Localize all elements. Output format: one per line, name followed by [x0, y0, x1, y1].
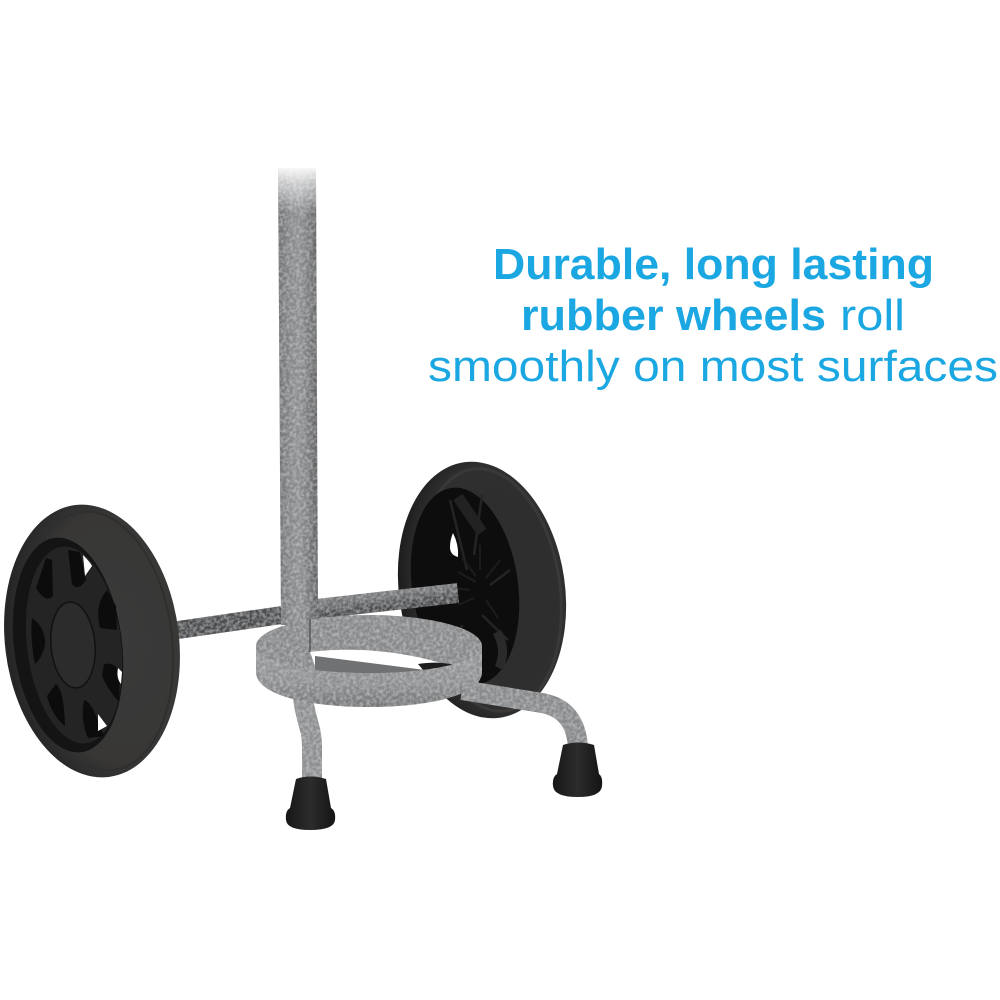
hub face — [15, 541, 133, 749]
hub opening — [1, 531, 135, 759]
ring seam — [309, 619, 311, 652]
pole body — [278, 168, 318, 625]
text line 2: roll — [840, 291, 905, 340]
gaps in hub — [83, 555, 122, 731]
right rear wheel — [382, 451, 582, 729]
hub slots — [31, 550, 120, 738]
text line 3: smoothly on most surfaces — [428, 342, 998, 391]
ring front band — [256, 646, 482, 707]
left front wheel — [0, 494, 195, 788]
heading: wheel description — [428, 240, 998, 391]
hub opening — [399, 481, 531, 691]
left rubber foot — [286, 776, 335, 830]
text line 1: Durable, long lasting — [493, 240, 934, 289]
central pole — [274, 165, 322, 625]
axle: right — [316, 593, 458, 609]
ring opening — [310, 650, 452, 680]
text line 2: rubber wheels — [521, 291, 826, 340]
hub ribs — [452, 545, 500, 618]
axle: left — [178, 615, 282, 630]
centre cap — [47, 600, 99, 690]
tyre tread line — [9, 503, 187, 779]
hub spokes — [450, 495, 510, 690]
tyre — [0, 494, 195, 788]
tyre tread highlight — [404, 459, 576, 721]
tyre — [382, 451, 582, 729]
rod under ring — [315, 656, 425, 680]
front right leg — [462, 690, 578, 748]
pole top fade — [274, 165, 322, 213]
right rubber foot — [553, 742, 602, 797]
rear left leg — [303, 698, 312, 782]
support ring — [256, 615, 482, 695]
ring back wall — [256, 615, 482, 672]
gap in hub — [450, 533, 458, 557]
wheel seen through ring — [418, 663, 480, 695]
